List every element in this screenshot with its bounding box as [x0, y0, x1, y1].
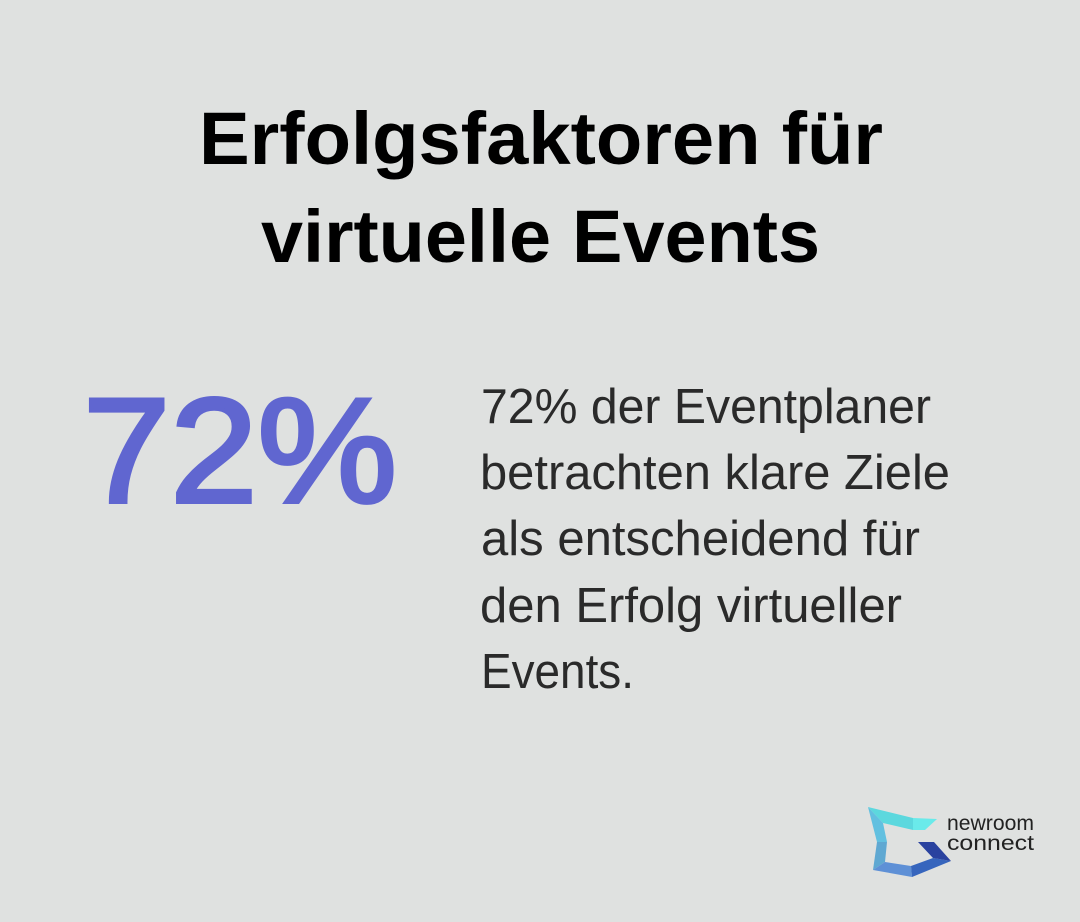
title: virtuelle Events: [261, 195, 820, 278]
description text: betrachten klare Ziele: [480, 446, 950, 500]
logo wordmark: [947, 812, 1034, 855]
description text: den Erfolg virtueller: [480, 579, 902, 633]
title: [199, 97, 883, 278]
description text: 72% der Eventplaner: [481, 380, 931, 434]
logo wordmark: connect: [947, 832, 1034, 855]
big statistic: 72%: 72%: [83, 367, 397, 534]
description text: Events.: [481, 645, 634, 699]
logo: newroom connect: [868, 807, 1034, 877]
logo wordmark: newroom: [947, 812, 1034, 835]
description text: [480, 380, 950, 699]
description text: als entscheidend für: [481, 512, 920, 566]
title: Erfolgsfaktoren für: [199, 97, 883, 180]
icon: logo mark: [868, 807, 951, 877]
